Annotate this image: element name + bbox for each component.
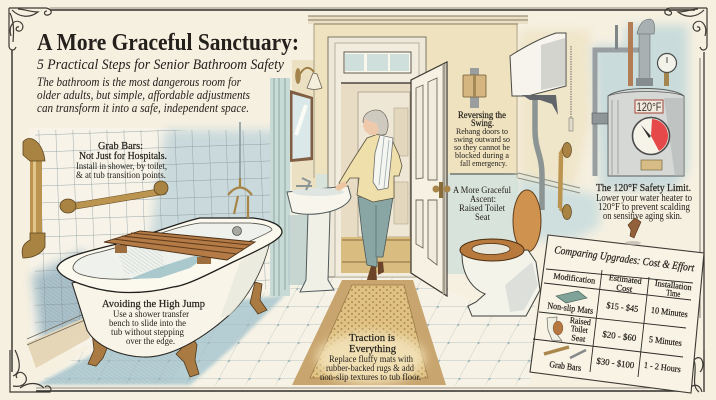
callout: grab bars: Install in shower, by toilet, [76,161,167,171]
mirror [290,90,313,162]
callout: traction is everything: Traction is [349,332,395,344]
callout: 120F safety limit: The 120°F Safety Limit. [596,183,691,194]
callout: traction is everything: rubber-backed rugs & add [326,364,414,374]
callout: 120F safety limit: Lower your water heater to [596,193,692,204]
row: raised toilet seat: $20 - $60 [602,329,637,343]
row: grab bars: Grab Bars [549,359,582,373]
left wall tiles [27,128,285,368]
callout: raised toilet seat: A More Graceful [453,185,511,196]
callout: avoiding the high jump: Use a shower transfer [113,309,190,320]
row: raised toilet seat: Seat [571,332,587,344]
row: grab bars: 1 - 2 Hours [643,360,682,374]
callout: reversing the swing: Reversing the [458,111,506,121]
row: non-slip mats: 10 Minutes [650,305,689,319]
door frame and transom [328,37,426,277]
pedestal sink [287,178,351,292]
pipes [595,50,640,176]
callout: reversing the swing: Swing. [471,119,494,129]
shoes [366,266,377,287]
row: grab bars: $30 - $100 [596,356,635,370]
back wall [292,16,528,274]
icon: push pin [625,218,641,245]
bowl [462,250,540,316]
callout: 120F safety limit [596,183,692,222]
callout: raised toilet seat [453,185,511,223]
intro paragraph [37,75,250,115]
temperature dial [632,118,670,154]
tub faucet [228,122,252,218]
shirt [339,134,402,202]
tub interior [73,223,272,279]
subtitle: 5 Practical Steps for Senior Bathroom Safety [37,57,284,73]
callout: reversing the swing: so they cannot be [454,142,510,152]
callout: 120F safety limit: 120°F to prevent scalding [598,202,690,213]
tub feet [88,332,108,366]
callout: traction is everything: non-slip textures to tub floor. [320,372,421,383]
toilet [460,33,573,316]
door knob [432,186,440,192]
row: raised toilet seat: Raised [569,315,592,327]
seat [460,239,524,261]
tank [608,88,684,176]
column headers: Modification [553,271,597,286]
callout: avoiding the high jump: over the edge. [126,337,175,347]
floor [35,272,535,385]
column headers [553,271,693,299]
callout: raised toilet seat: Seat [475,213,490,223]
hand [335,181,347,191]
row: raised toilet seat [547,315,683,348]
wall sconce [295,68,322,90]
icon: door hinge [463,68,486,108]
row: grab bars [544,347,682,374]
callout: avoiding the high jump [102,298,205,347]
hair [363,110,388,135]
water heater [592,19,684,176]
pressure gauge [664,72,669,86]
transfer bench [104,231,255,264]
callout: grab bars: Grab Bars: [98,141,143,152]
paper note [530,235,704,393]
callout: reversing the swing: swing outward so [454,134,510,144]
tub body [72,240,270,357]
callout: 120F safety limit: on sensitive aging skin. [603,211,682,222]
right wall wash [518,25,688,240]
intro paragraph: older adults, but simple, affordable adjustments [37,88,250,102]
intro paragraph: The bathroom is the most dangerous room for [37,75,241,89]
callout: traction is everything [320,332,421,383]
vertical grab bar [22,138,45,258]
corner ornament: top right [665,8,707,50]
curtain [270,78,290,296]
callout: grab bars: Not Just for Hospitals. [79,151,167,162]
callout: reversing the swing [454,111,510,168]
row: raised toilet seat: Toilet [570,323,589,335]
tub rim [57,218,282,292]
table title: Comparing Upgrades: Cost & Effort [554,244,696,274]
callout: grab bars [76,141,167,180]
horizontal grab bar [60,181,168,213]
corner ornament: bottom right [688,350,704,392]
pull chain [570,46,572,122]
data plate [641,160,662,170]
row: non-slip mats: Non-slip Mats [547,300,594,316]
callout: raised toilet seat: Raised Toilet [459,204,505,214]
face [363,118,379,135]
table grid [533,269,693,377]
towel [373,135,393,190]
callout: grab bars: & at tub transition points. [76,170,166,180]
title: A More Graceful Sanctuary: [37,30,299,56]
callout: reversing the swing: Rehang doors to [456,126,508,136]
trousers [358,197,393,267]
callout: traction is everything: Replace fluffy mats with [329,354,413,365]
column headers: Installation [654,278,693,292]
flush pipe [535,95,542,210]
row: non-slip mats: $15 - $45 [606,300,639,314]
cistern [510,33,566,96]
claw foot bathtub [57,218,282,377]
wall grab bar near toilet [560,142,572,220]
callout: reversing the swing: blocked during a [455,150,509,160]
comparison table note [530,218,704,393]
callout: traction is everything: Everything [349,343,396,355]
woman [335,110,402,287]
callout: raised toilet seat: Ascent: [470,195,496,205]
drain [232,226,242,236]
column headers: Cost [616,282,634,294]
callout: reversing the swing: fall emergency. [460,158,507,168]
callout: avoiding the high jump: Avoiding the High Jump [102,298,205,310]
callout: avoiding the high jump: bench to slide into the [109,319,186,329]
callout: avoiding the high jump: tub without stepping [111,328,184,338]
corner ornament: top left [9,8,51,50]
open door [411,62,450,296]
rug [292,280,446,385]
temperature label [635,100,663,113]
corner ornament: bottom left [10,350,51,392]
row: raised toilet seat: 5 Minutes [648,334,683,348]
column headers: Estimated [608,272,643,286]
wooden lid [513,190,541,252]
intro paragraph: can transform it into a safe, independent space. [37,101,249,115]
water heater: 120°F [636,102,662,114]
row: non-slip mats [547,291,689,319]
column headers: Time [666,287,681,299]
